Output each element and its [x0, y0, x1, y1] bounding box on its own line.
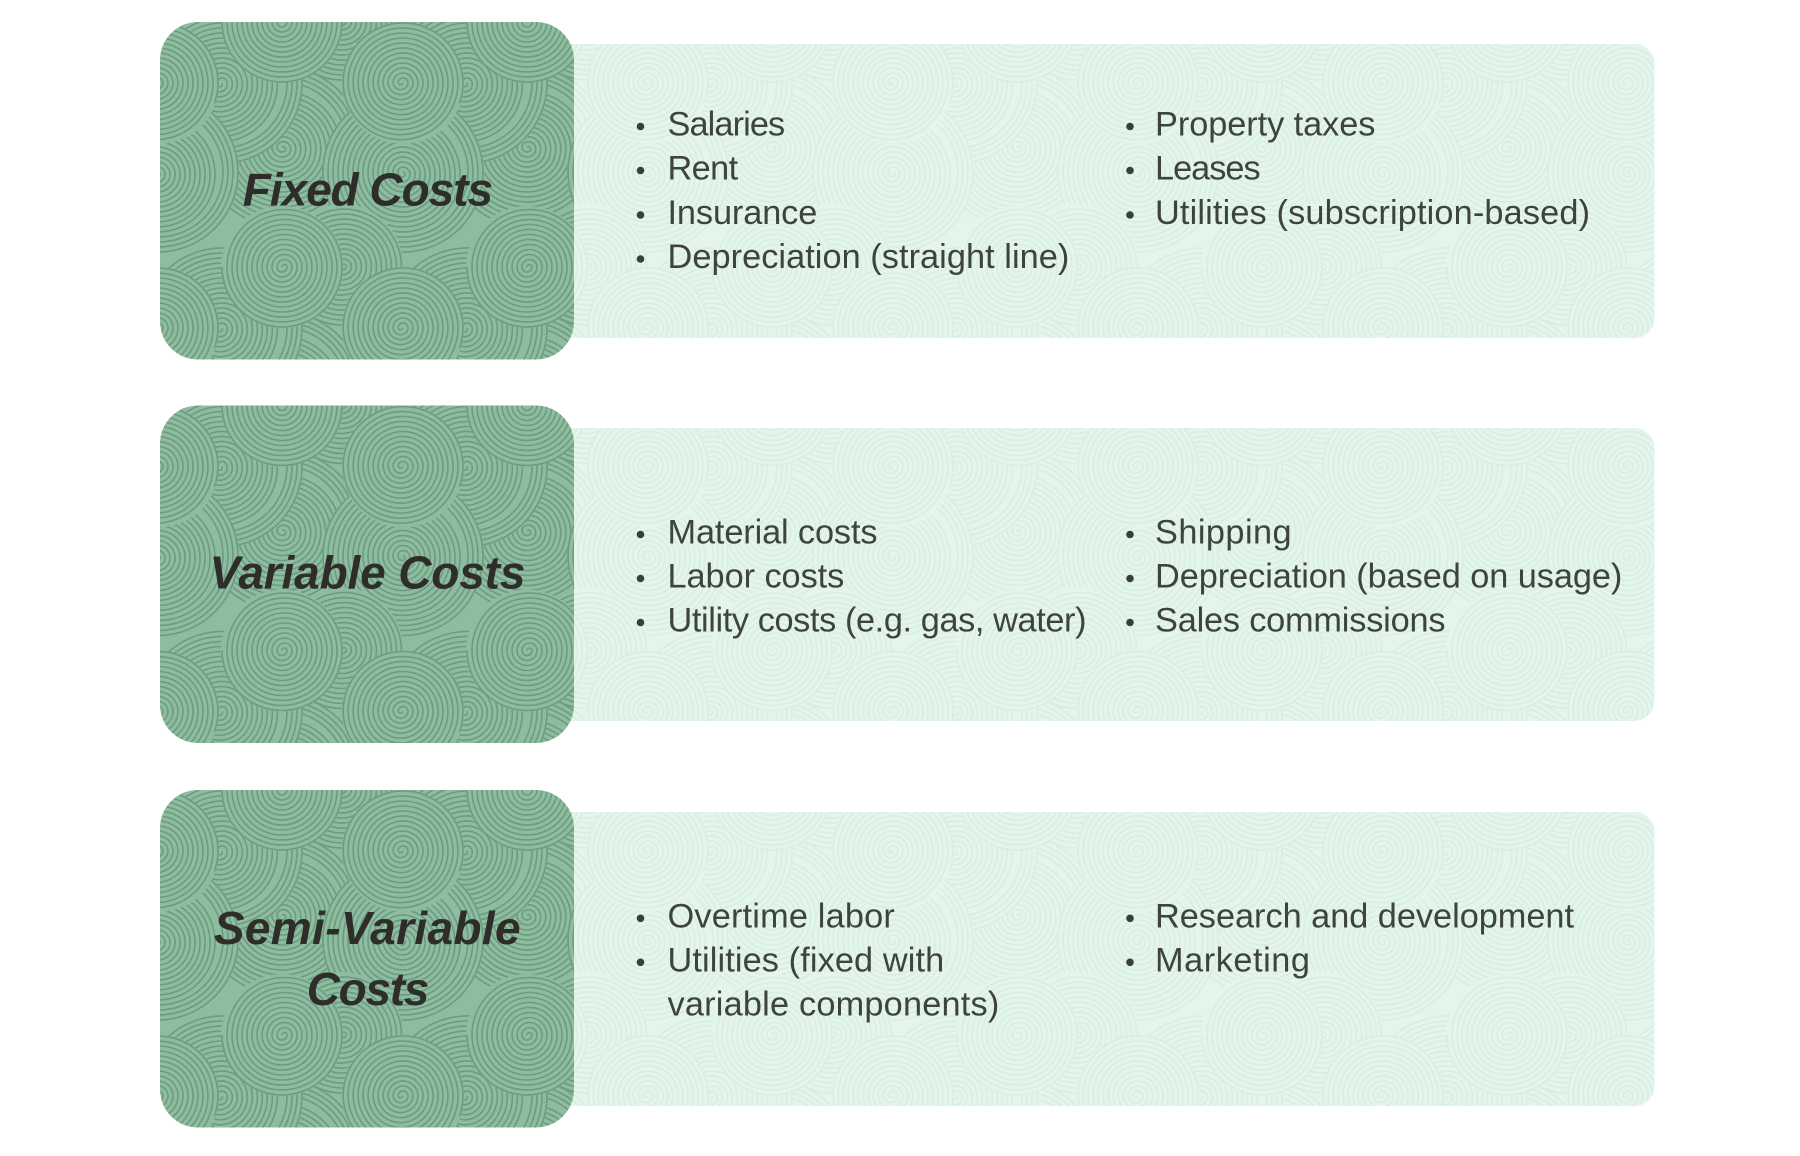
list: variable costs left column: Material costs [668, 514, 878, 552]
list: variable costs right column [1126, 514, 1622, 640]
list: variable costs right column: Depreciation (based on usage) [1155, 558, 1622, 596]
list: semi-variable costs right column: Marketing [1155, 941, 1310, 979]
list: semi-variable costs left column [637, 897, 999, 1023]
heading: variable costs: Variable Costs [210, 546, 525, 598]
semi-variable costs heading box [160, 790, 574, 1128]
list: fixed costs right column: Utilities (subscription-based) [1155, 194, 1590, 232]
fixed costs heading box [160, 22, 574, 360]
list: semi-variable costs left column: variable components) [668, 985, 999, 1023]
panel: variable costs [160, 406, 1654, 743]
list: semi-variable costs right column: Research and development [1155, 897, 1574, 935]
variable costs heading box [160, 406, 574, 743]
heading: semi-variable costs [214, 902, 521, 1015]
panel: semi-variable costs [160, 790, 1654, 1128]
heading: semi-variable costs: Semi-Variable [214, 902, 521, 954]
heading: semi-variable costs: Costs [307, 963, 429, 1015]
list: variable costs left column [637, 514, 1086, 640]
fixed costs list background [540, 44, 1654, 338]
list: semi-variable costs right column [1126, 897, 1574, 979]
list: variable costs left column: Labor costs [668, 558, 844, 596]
variable costs list background [540, 428, 1654, 721]
list: semi-variable costs left column: Overtime labor [668, 897, 895, 935]
list: fixed costs left column: Insurance [668, 194, 817, 232]
heading: fixed costs: Fixed Costs [243, 164, 492, 216]
list: fixed costs left column [637, 106, 1069, 276]
list: fixed costs right column: Property taxes [1155, 106, 1375, 144]
list: variable costs right column: Shipping [1155, 514, 1292, 552]
panel: fixed costs [160, 22, 1654, 360]
list: fixed costs left column: Rent [668, 150, 739, 188]
list: semi-variable costs left column: Utilities (fixed with [668, 941, 944, 979]
list: variable costs right column: Sales commissions [1155, 602, 1446, 640]
semi-variable costs list background [540, 812, 1654, 1106]
list: fixed costs left column: Depreciation (straight line) [668, 238, 1069, 276]
list: fixed costs right column: Leases [1155, 150, 1261, 188]
list: fixed costs left column: Salaries [668, 106, 785, 144]
list: variable costs left column: Utility costs (e.g. gas, water) [668, 602, 1086, 640]
list: fixed costs right column [1126, 106, 1590, 232]
